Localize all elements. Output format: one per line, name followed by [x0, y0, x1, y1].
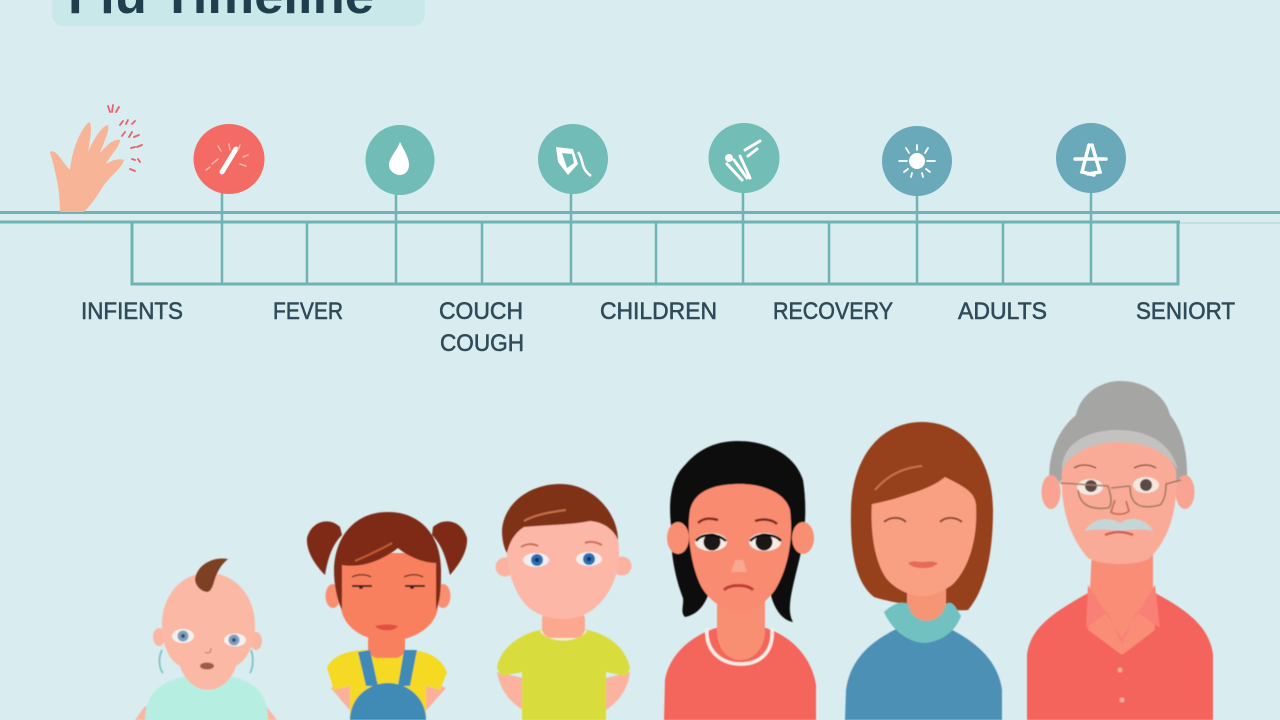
marker: water drop	[366, 125, 434, 195]
label: couch: COUCH	[439, 298, 523, 325]
label: adults: ADULTS	[958, 298, 1047, 325]
marker: spray	[708, 123, 780, 193]
figure: woman with black hair	[664, 441, 816, 720]
label: seniort: SENIORT	[1136, 298, 1235, 325]
figure: girl with pigtails	[307, 512, 467, 720]
label: fever: FEVER	[273, 298, 343, 325]
label: recovery: RECOVERY	[773, 298, 893, 325]
timeline track	[0, 190, 1280, 284]
labels	[81, 298, 1235, 357]
marker: person	[1056, 123, 1126, 193]
label: infients: INFIENTS	[81, 298, 183, 325]
figure: baby	[135, 558, 277, 720]
figure: woman with brown hair and scarf	[845, 422, 1002, 720]
marker: sun	[882, 126, 952, 196]
label: children: CHILDREN	[600, 298, 717, 325]
label: cough: COUGH	[440, 330, 524, 357]
marker: fever thermometer	[194, 124, 264, 194]
marker: tissue	[538, 124, 608, 194]
figure: senior man	[1027, 381, 1213, 720]
figure: boy	[496, 484, 632, 720]
icon: hand sneezing germs	[50, 105, 142, 212]
